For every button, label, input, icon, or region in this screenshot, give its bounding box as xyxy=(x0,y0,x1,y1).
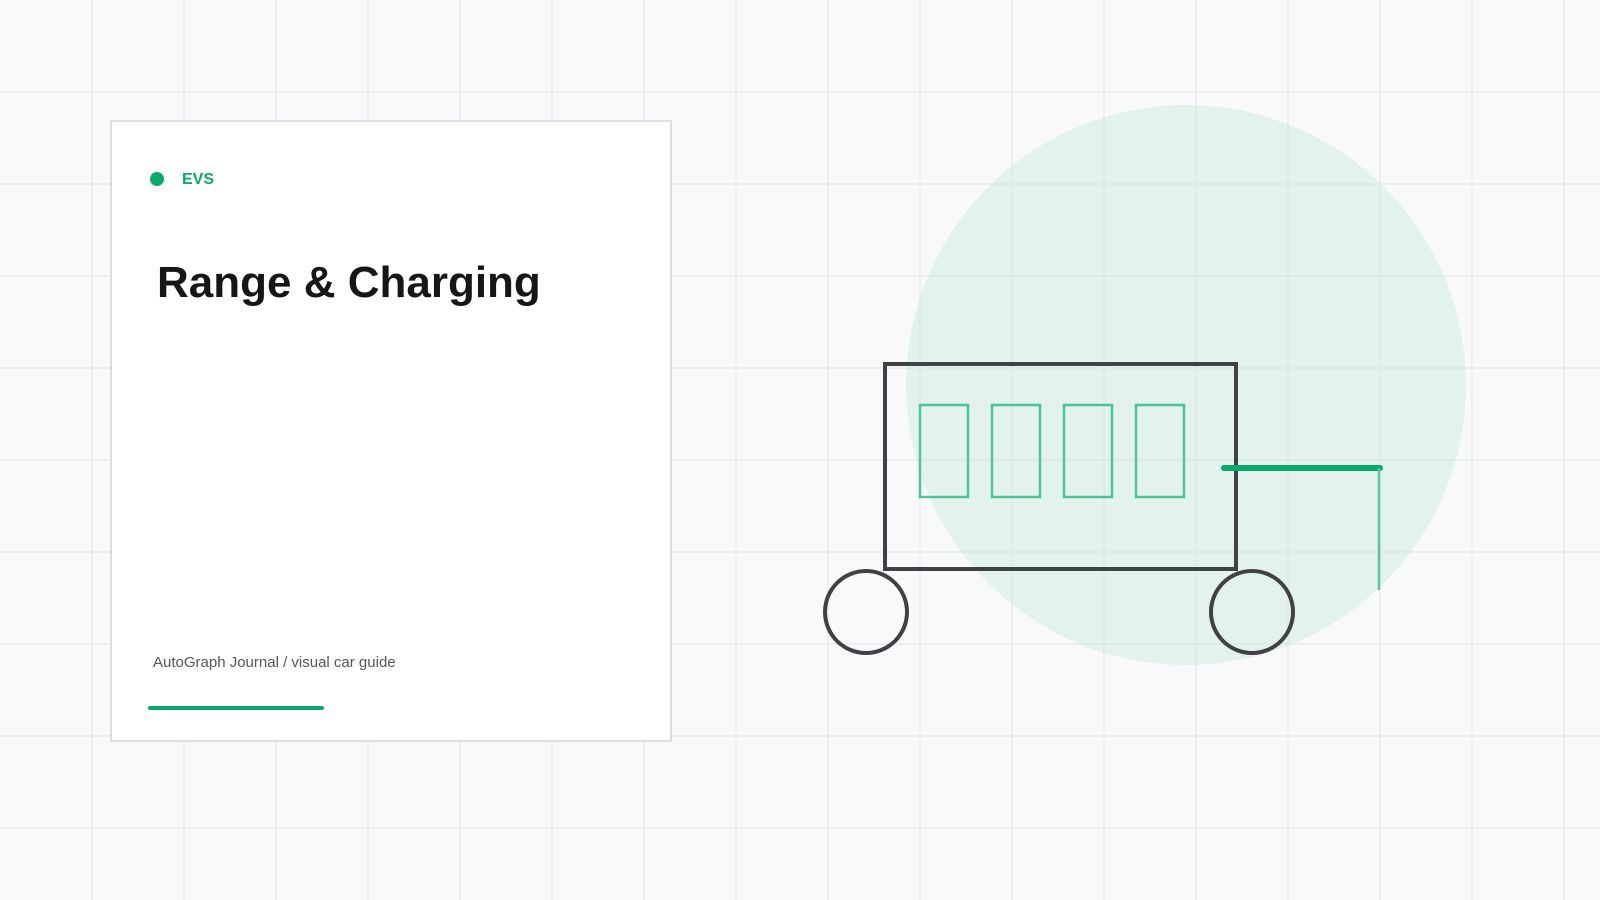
tag: EVS xyxy=(150,171,214,188)
accent bar xyxy=(148,706,324,710)
windows xyxy=(920,405,1184,497)
subtitle: AutoGraph Journal / visual car guide xyxy=(153,654,396,671)
background circle xyxy=(906,105,1466,665)
title: Range & Charging xyxy=(157,258,541,307)
charging cable xyxy=(1224,468,1380,590)
panel: title card xyxy=(110,120,672,742)
car body xyxy=(885,364,1236,569)
tag: EVS: EVS xyxy=(182,171,214,188)
wheels xyxy=(825,571,1293,653)
